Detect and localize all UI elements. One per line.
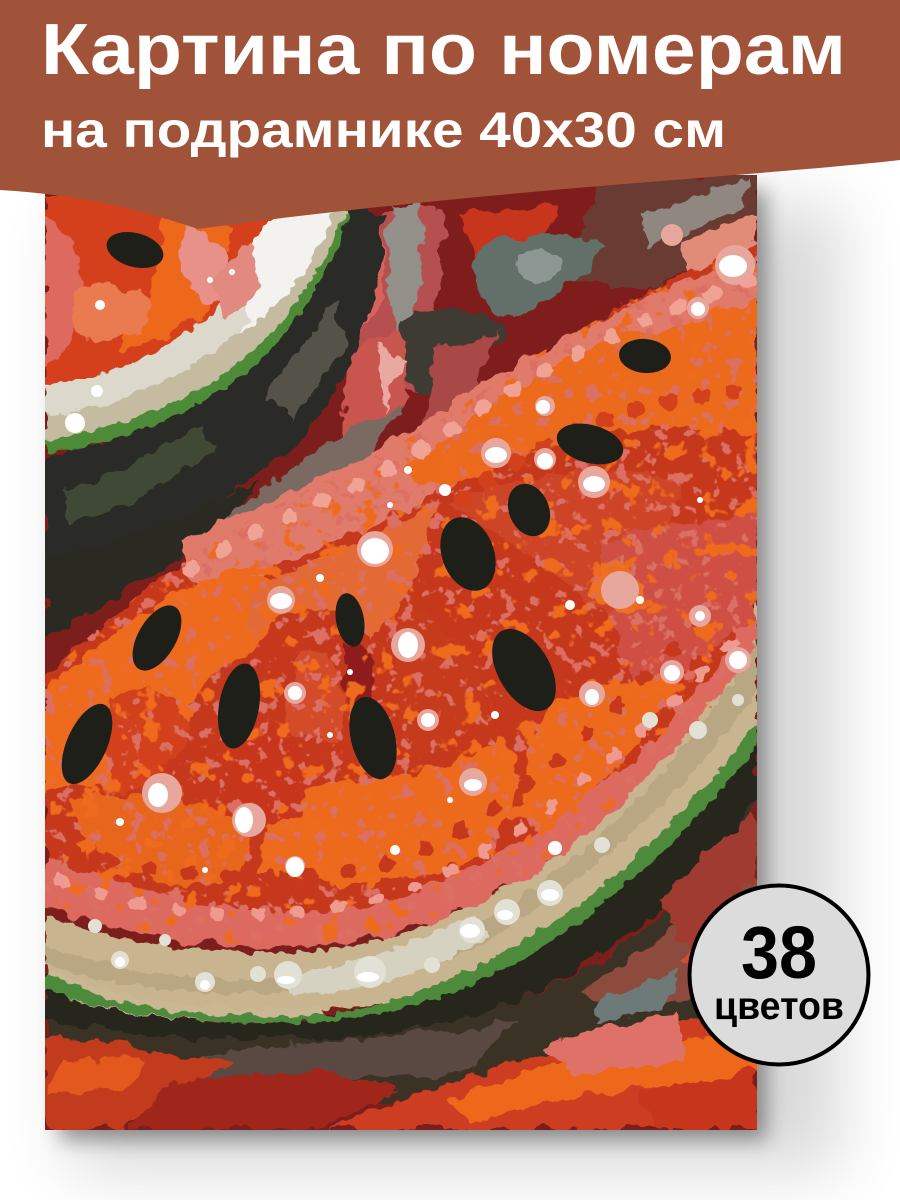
flesh mottling bbox=[45, 245, 757, 945]
badge: 38 colours: 38 bbox=[741, 911, 817, 994]
badge: 38 colours: цветов bbox=[714, 985, 844, 1028]
canvas shadow bbox=[60, 190, 840, 1170]
upper left slice rind bbox=[45, 210, 350, 453]
painting: watermelon slices bbox=[45, 175, 757, 1130]
badge: 38 colours bbox=[690, 886, 868, 1064]
subtitle: на подрамнике 40х30 см bbox=[41, 102, 726, 158]
water droplets bbox=[65, 224, 755, 992]
dark rind band of upper slice bbox=[45, 205, 400, 640]
bottom slices bbox=[45, 1005, 757, 1130]
background: upper right area bbox=[330, 175, 757, 440]
main slice dark rind band bbox=[45, 735, 757, 1100]
brown header banner bbox=[0, 0, 900, 229]
flesh speckles bbox=[60, 280, 750, 914]
main slice flesh bbox=[45, 245, 757, 946]
seeds bbox=[51, 226, 672, 791]
main slice rind bbox=[45, 600, 757, 1023]
upper left slice flesh bbox=[45, 196, 274, 392]
title: Картина по номерам bbox=[41, 10, 846, 90]
